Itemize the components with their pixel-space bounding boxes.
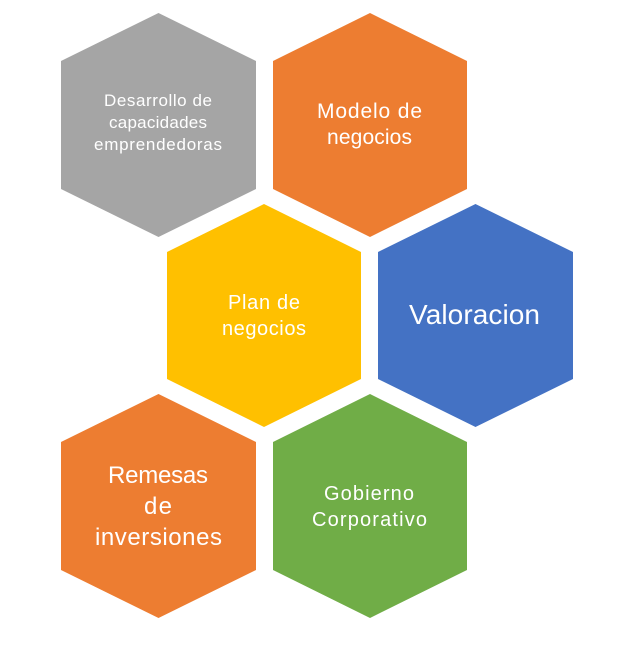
hexagon: Plan de negocios: negocios — [222, 318, 306, 340]
hexagon: Remesas de inversiones: Remesas — [108, 462, 208, 489]
hexagon: Desarrollo de capacidades emprendedoras: Desarrollo de — [104, 91, 212, 110]
hexagon: Valoracion — [378, 204, 573, 427]
hexagon: Plan de negocios — [167, 204, 361, 427]
hexagon: Valoracion: Valoracion — [409, 299, 540, 330]
hexagon: Remesas de inversiones — [61, 394, 256, 618]
hexagon: Gobierno Corporativo — [273, 394, 467, 618]
hexagon: Desarrollo de capacidades emprendedoras — [61, 13, 256, 237]
hexagon: Modelo de negocios — [273, 13, 467, 237]
hexagon: Remesas de inversiones: de — [144, 493, 172, 520]
hexagon: Plan de negocios: Plan de — [228, 292, 300, 314]
hexagon: Modelo de negocios: Modelo de — [317, 100, 422, 123]
hexagon: Gobierno Corporativo: Gobierno — [324, 483, 414, 505]
hexagon: Modelo de negocios: negocios — [327, 126, 412, 149]
hexagon: Gobierno Corporativo: Corporativo — [312, 509, 427, 531]
hexagon: Desarrollo de capacidades emprendedoras: capacidades — [109, 113, 207, 132]
hexagon: Desarrollo de capacidades emprendedoras: emprendedoras — [94, 135, 222, 154]
hexagon: Remesas de inversiones: inversiones — [95, 524, 222, 551]
